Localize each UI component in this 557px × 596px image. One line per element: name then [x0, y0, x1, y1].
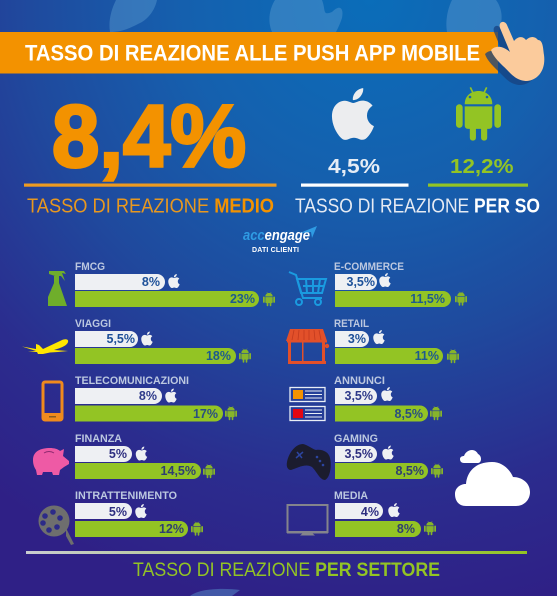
caption: TASSO DI REAZIONE MEDIO [27, 194, 274, 218]
divider [26, 551, 527, 554]
row: E-COMMERCE: E-COMMERCE [334, 261, 404, 273]
icon: pointing hand [485, 22, 544, 85]
icon: film reel [38, 506, 74, 545]
icon: smartphone [43, 382, 62, 421]
row: RETAIL: 3% [348, 332, 366, 346]
sector caption: TASSO DI REAZIONE PER SETTORE [133, 560, 440, 581]
icon: apple large [332, 88, 374, 140]
caption: TASSO DI REAZIONE PER SO [295, 194, 540, 218]
row: RETAIL [286, 318, 459, 364]
row: GAMING [287, 433, 443, 480]
row: INTRATTENIMENTO: 12% [159, 522, 184, 536]
icon: shopping cart [289, 272, 326, 305]
row: E-COMMERCE [289, 261, 467, 307]
row: E-COMMERCE: 11,5% [410, 292, 445, 306]
icon: monitor [287, 505, 328, 536]
row: MEDIA: MEDIA [334, 490, 368, 502]
row: MEDIA: 8% [397, 522, 415, 536]
row: ANNUNCI: ANNUNCI [334, 375, 385, 387]
row: MEDIA [287, 490, 436, 537]
accengage logo [243, 226, 317, 254]
row: FINANZA: 14,5% [161, 464, 196, 478]
icon: newspapers [290, 388, 325, 420]
row: TELECOMUNICAZIONI: TELECOMUNICAZIONI [75, 375, 189, 387]
row: FINANZA [33, 433, 215, 479]
row: MEDIA: 4% [361, 505, 379, 519]
row: INTRATTENIMENTO: 5% [109, 505, 127, 519]
row: VIAGGI: VIAGGI [75, 318, 111, 330]
icon: shop [286, 329, 329, 364]
row: GAMING: GAMING [334, 433, 378, 445]
icon: piggy bank [33, 448, 69, 475]
row: FMCG: 8% [142, 275, 160, 289]
row: RETAIL: 11% [415, 349, 439, 363]
icon: gamepad [287, 444, 331, 480]
world map silhouettes [109, 0, 502, 596]
row: E-COMMERCE: 3,5% [346, 275, 375, 289]
stat: average rate [24, 86, 276, 218]
row: TELECOMUNICAZIONI [43, 375, 237, 422]
row: FINANZA: 5% [109, 447, 127, 461]
row: FINANZA: FINANZA [75, 433, 122, 445]
icon: android large [456, 87, 501, 141]
icon: spray bottle [48, 271, 67, 306]
row: ANNUNCI [290, 375, 442, 422]
row: ANNUNCI: 8,5% [394, 407, 423, 421]
stat: rate per OS [295, 87, 540, 218]
row: VIAGGI: 5,5% [106, 332, 135, 346]
row: RETAIL: RETAIL [334, 318, 369, 330]
row: INTRATTENIMENTO [38, 490, 203, 545]
row: GAMING: 3,5% [344, 447, 373, 461]
row: FMCG [48, 261, 275, 307]
big number: 8,4% [52, 86, 246, 186]
row: VIAGGI [22, 318, 251, 364]
row: ANNUNCI: 3,5% [344, 389, 373, 403]
row: GAMING: 8,5% [396, 464, 424, 478]
row: INTRATTENIMENTO: INTRATTENIMENTO [75, 490, 177, 502]
accengage logo: DATI CLIENTI [252, 247, 299, 254]
accengage logo: accengage [243, 227, 310, 244]
row: TELECOMUNICAZIONI: 17% [193, 407, 218, 421]
title banner [0, 32, 498, 74]
row: FMCG: FMCG [75, 261, 105, 273]
icon: clouds [455, 450, 530, 506]
title: TASSO DI REAZIONE ALLE PUSH APP MOBILE [25, 40, 480, 66]
row: FMCG: 23% [230, 292, 255, 306]
Android value: 12,2% [450, 155, 514, 178]
row: TELECOMUNICAZIONI: 8% [139, 389, 157, 403]
row: VIAGGI: 18% [206, 349, 231, 363]
iOS value: 4,5% [328, 155, 380, 178]
icon: airplane [22, 339, 68, 354]
